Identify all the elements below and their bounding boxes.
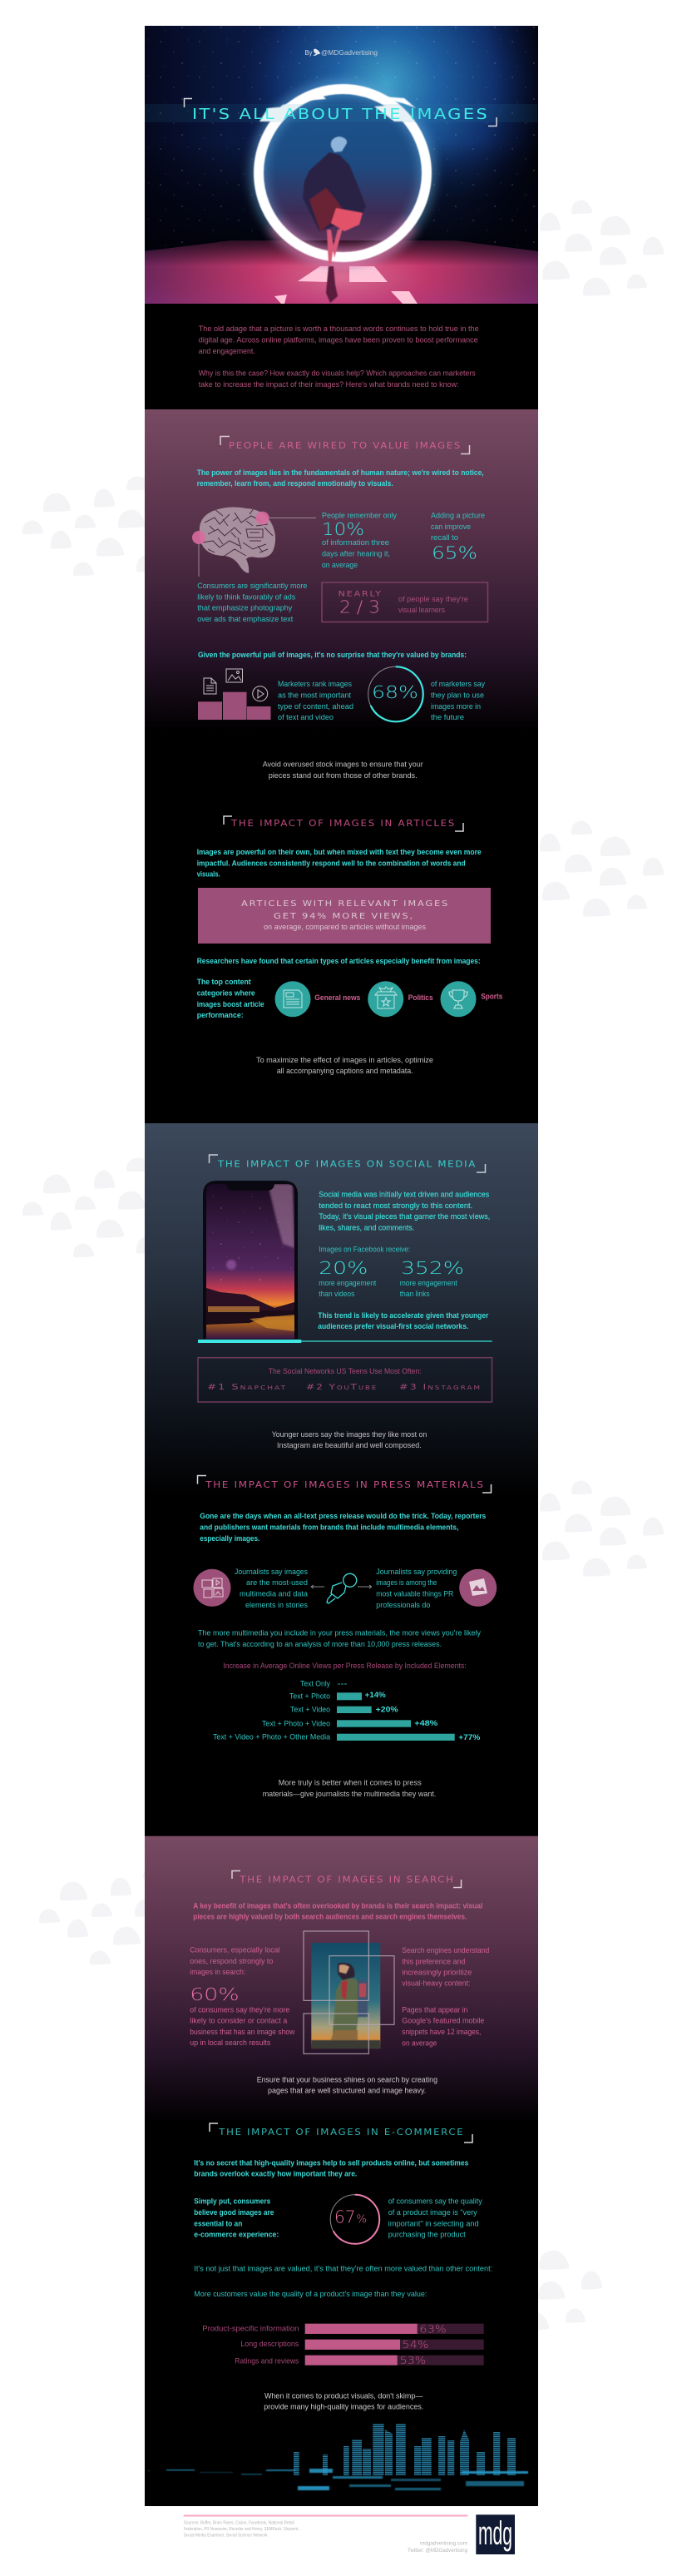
- sources: Social Media Examiner, Social Science Network: [184, 2534, 268, 2539]
- contact: [408, 2541, 467, 2554]
- row: text + photo + video: +48%: [414, 1719, 437, 1727]
- lead text: and publishers want materials from brands that include multimedia elements,: [200, 1523, 458, 1532]
- takeaway: instagram: Instagram are beautiful and well composed.: [277, 1441, 422, 1449]
- takeaway: captions and metadata: To maximize the effect of images in articles, optimize: [256, 1056, 433, 1064]
- stat: 352 percent: more engagement: [400, 1279, 457, 1287]
- lead text: brands overlook exactly how important they are.: [194, 2170, 357, 2178]
- text: top categories: [197, 978, 264, 1019]
- text: consumers: over ads that emphasize text: [197, 615, 294, 623]
- icon: bird: [313, 48, 320, 56]
- image: explorer looking up, with frames: [304, 1931, 394, 2053]
- contact: Twitter: @MDGadvertising: [408, 2549, 467, 2554]
- text: quality of a product image: purchasing the product: [388, 2231, 466, 2239]
- text: simply put: e-commerce experience:: [194, 2231, 279, 2239]
- text: search engines: this preference and: [402, 1957, 465, 1965]
- text: top categories: categories where: [197, 989, 255, 998]
- takeaway: stock images: pieces stand out from those of other brands.: [269, 771, 418, 780]
- row: long descriptions: 54%: [403, 2339, 428, 2351]
- heading: [198, 1476, 491, 1493]
- row: text + photo + video: Text + Photo + Video: [262, 1719, 330, 1727]
- icon: document: [204, 678, 216, 694]
- stat: 65 percent: Adding a picture: [431, 512, 485, 520]
- heading: [224, 816, 463, 831]
- text: search engines: on average: [402, 2039, 437, 2047]
- stat: 10 percent: 10%: [322, 519, 364, 539]
- stat: 10 percent: on average: [322, 561, 358, 569]
- text: marketers plan: the future: [431, 713, 464, 721]
- bar chart: views by elements: Text Only: [300, 1680, 330, 1688]
- illustration: neon city skyline: [148, 2424, 528, 2490]
- arrow: right: [358, 1585, 372, 1588]
- row: all media: +77%: [458, 1733, 480, 1741]
- heading: THE IMPACT OF IMAGES IN ARTICLES: [230, 819, 456, 829]
- text: quality of a product image: of consumers say the quality: [388, 2197, 482, 2206]
- row: all media: [213, 1733, 480, 1741]
- panel: impact of images in search: [145, 1836, 538, 2123]
- icon: video play: [253, 686, 268, 701]
- panel: dark backdrop column: [145, 26, 538, 2506]
- takeaway: product visuals: [264, 2391, 423, 2411]
- text block: intro: digital age. Across online platforms, images have been proven to boost performance: [199, 336, 478, 344]
- row: text + video: Text + Video: [290, 1706, 330, 1714]
- lead text: visuals.: [197, 870, 220, 879]
- row: text + video: [290, 1705, 398, 1714]
- row: text + video: +20%: [376, 1705, 398, 1713]
- stat: 20 percent: more engagement: [319, 1279, 377, 1287]
- callout: social networks teens use: [198, 1358, 492, 1402]
- heading: THE IMPACT OF IMAGES IN E-COMMERCE: [218, 2128, 464, 2138]
- stat: 65 percent: 65%: [432, 543, 477, 563]
- contact: mdgadvertising.com: [420, 2541, 467, 2546]
- icon: general news: [274, 981, 360, 1017]
- text: more valued: It's not just that images are valued, it's that they're often more valued than other content:: [194, 2264, 492, 2272]
- bar chart: customer values: [202, 2323, 484, 2366]
- heading: [220, 436, 469, 454]
- text: more valued: [194, 2264, 492, 2298]
- subhead: researchers: Researchers have found that certain types of articles especially benefit from images:: [197, 957, 481, 965]
- logo: mdg: [476, 2514, 515, 2554]
- callout: nearly 2/3: [322, 582, 487, 622]
- text: more multimedia: to get. That's according to an analysis of more than 10,000 press releases.: [198, 1640, 442, 1648]
- text: marketers rank images: [278, 680, 353, 721]
- stat: 10 percent: [322, 512, 397, 569]
- takeaway: stock images: Avoid overused stock images to ensure that your: [263, 760, 423, 769]
- text: journalists providing: Journalists say providing: [376, 1568, 457, 1576]
- subhead: brands: Given the powerful pull of images, it's no surprise that they're valued by brands:: [198, 651, 467, 659]
- text: more valued: More customers value the quality of a product's image than they value:: [194, 2290, 427, 2298]
- sources: Federation, PR Newswire, Rountier and Henry, SEMRush, Skyword,: [184, 2527, 299, 2532]
- stat: 60 percent: 60%: [190, 1984, 240, 2004]
- donut: 68 percent: [368, 666, 423, 721]
- text: simply put: Simply put, consumers: [194, 2197, 270, 2206]
- row: ratings and reviews: Ratings and reviews: [235, 2356, 299, 2365]
- stat: 60 percent: likely to consider or contact a: [190, 2017, 288, 2025]
- icon: picture: [226, 669, 243, 682]
- panel: impact of images in press materials: [193, 1476, 497, 1798]
- text: marketers plan: they plan to use: [431, 691, 484, 700]
- text: social media: likes, shares, and comments.: [319, 1224, 414, 1232]
- text: journalists images: [235, 1568, 309, 1609]
- panel: impact of images on social media: [145, 1123, 538, 1498]
- text: search engines: Google's featured mobile: [402, 2017, 484, 2025]
- text: marketers rank images: type of content, ahead: [278, 702, 353, 711]
- text block: intro: The old adage that a picture is worth a thousand words continues to hold true in the: [199, 324, 479, 333]
- figure: [303, 136, 366, 303]
- lead text: remember, learn from, and respond emotionally to visuals.: [197, 479, 393, 488]
- takeaway: search: Ensure that your business shines on search by creating: [257, 2075, 437, 2083]
- text: journalists providing: professionals do: [376, 1601, 430, 1609]
- takeaway: instagram: [272, 1430, 427, 1449]
- text: journalists providing: [376, 1568, 457, 1609]
- text: marketers rank images: as the most important: [278, 691, 351, 700]
- text: social media: [319, 1191, 490, 1254]
- icon: multimedia: [193, 1569, 231, 1607]
- panel: impact of images in articles: [197, 816, 502, 1019]
- row: product information: 63%: [419, 2323, 447, 2335]
- text: marketers rank images: of text and video: [278, 713, 334, 721]
- callout: 94 percent more views: GET 94% MORE VIEWS,: [274, 912, 414, 921]
- brain callout dot top: [256, 512, 316, 525]
- lead text: A key benefit of images that's often overlooked by brands is their search impact: visual: [193, 1901, 482, 1910]
- icon: microphone: [327, 1573, 357, 1603]
- text: journalists images: are the most-used: [246, 1578, 308, 1587]
- floor: [145, 240, 538, 304]
- stat: 20 percent: 20%: [319, 1258, 368, 1278]
- icon: brain: [200, 508, 275, 573]
- stat: 60 percent: Consumers, especially local: [190, 1946, 279, 1954]
- donut: 67 percent: [330, 2195, 379, 2244]
- text: top categories: The top content: [197, 978, 251, 986]
- row: product information: [202, 2323, 484, 2335]
- text: marketers plan: images more in: [431, 702, 481, 711]
- stat: 60 percent: images in search:: [190, 1968, 245, 1976]
- byline: By: [304, 48, 313, 57]
- text: social media: Social media was initially text driven and audiences: [319, 1191, 490, 1199]
- callout: social networks teens use: The Social Networks US Teens Use Most Often:: [269, 1367, 422, 1375]
- stat: 352 percent: than links: [400, 1290, 430, 1298]
- row: text + photo: +14%: [365, 1691, 386, 1699]
- text: more multimedia: The more multimedia you include in your press materials, the more views you're likely: [198, 1629, 481, 1637]
- lead text: pieces are highly valued by both search audiences and search engines themselves.: [193, 1913, 467, 1921]
- title: IT'S ALL ABOUT THE IMAGES: [192, 106, 489, 123]
- lead text: impactful. Audiences consistently respond well to the combination of words and: [197, 859, 466, 868]
- background dotted blob clusters: [22, 200, 664, 2331]
- panel: impact of images in e-commerce: [148, 2123, 528, 2490]
- text: top categories: performance:: [197, 1011, 244, 1019]
- stat: 10 percent: days after hearing it,: [322, 549, 390, 557]
- text: journalists images: elements in stories: [245, 1601, 308, 1609]
- callout: nearly 2/3: of people say they're: [398, 595, 468, 603]
- text: marketers plan: [431, 680, 485, 721]
- text: social media: Images on Facebook receive:: [319, 1246, 410, 1254]
- chart title: Increase in Average Online Views per Press Release by Included Elements:: [223, 1662, 467, 1670]
- callout: nearly 2/3: 2 / 3: [339, 597, 380, 617]
- icon: general news: General news: [314, 993, 360, 1002]
- stat: 10 percent: of information three: [322, 538, 389, 547]
- text block: intro: take to increase the impact of their images? Here's what brands need to know:: [199, 380, 459, 389]
- text: consumers: [197, 582, 307, 623]
- stat: 352 percent: [400, 1258, 464, 1298]
- text block: intro: [199, 324, 479, 389]
- takeaway: captions and metadata: all accompanying captions and metadata.: [277, 1067, 413, 1075]
- text: search engines: increasingly prioritize: [402, 1968, 472, 1976]
- text: search engines: [402, 1946, 489, 2047]
- takeaway: search: pages that are well structured and image heavy.: [268, 2087, 426, 2095]
- moon disc: [263, 93, 423, 253]
- stat: 20 percent: than videos: [319, 1290, 355, 1298]
- image: phone with night sky: [203, 1181, 298, 1339]
- text: trend: [318, 1311, 489, 1330]
- text: journalists images: multimedia and data: [240, 1590, 309, 1598]
- text: social media: tended to react most strongly to this content.: [319, 1201, 472, 1210]
- row: product information: Product-specific information: [202, 2324, 299, 2332]
- takeaway: product visuals: provide many high-quality images for audiences.: [264, 2403, 423, 2411]
- lead text: [200, 1512, 486, 1543]
- text: quality of a product image: of a product image is "very: [388, 2208, 477, 2217]
- bar chart: views by elements: [213, 1680, 480, 1741]
- row: text + photo: [289, 1691, 386, 1700]
- text: marketers rank images: Marketers rank images: [278, 680, 352, 688]
- text: simply put: essential to an: [194, 2219, 243, 2227]
- takeaway: captions and metadata: [256, 1056, 433, 1075]
- text: quality of a product image: important" in selecting and: [388, 2219, 479, 2227]
- panel: hero illustration and title: [145, 26, 538, 304]
- stat: 65 percent: [431, 512, 485, 563]
- text: journalists providing: most valuable things PR: [376, 1590, 454, 1598]
- text: quality of a product image: [388, 2197, 482, 2239]
- sources: [184, 2520, 299, 2539]
- stat: 60 percent: of consumers say they're more: [190, 2005, 289, 2014]
- text: journalists images: Journalists say images: [235, 1568, 308, 1576]
- lead text: [197, 848, 482, 879]
- stat: 60 percent: [190, 1946, 295, 2047]
- lead text: It's no secret that high-quality images help to sell products online, but sometimes: [194, 2158, 468, 2167]
- brain callout dot left: [192, 531, 205, 577]
- lead text: Images are powerful on their own, but when mixed with text they become even more: [197, 848, 482, 856]
- takeaway: press materials: [263, 1779, 436, 1798]
- text: search engines: visual-heavy content:: [402, 1979, 470, 1988]
- lead text: [193, 1901, 482, 1921]
- stat: 60 percent: ones, respond strongly to: [190, 1957, 273, 1965]
- ring glitch slices: [259, 96, 416, 121]
- text: simply put: believe good images are: [194, 2208, 274, 2217]
- stat: 65 percent: can improve: [431, 523, 471, 531]
- text: search engines: Search engines understand: [402, 1946, 489, 1954]
- callout: 94 percent more views: [198, 888, 491, 944]
- text: search engines: snippets have 12 images,: [402, 2028, 481, 2036]
- chart: content ranking podium: [198, 669, 271, 720]
- title: [185, 98, 497, 126]
- takeaway: press materials: More truly is better when it comes to press: [279, 1779, 422, 1787]
- text: top categories: images boost article: [197, 1000, 264, 1008]
- sources: Sources: Buffer, Brain Rules, Cision, Facebook, National Retail: [184, 2520, 294, 2525]
- text: journalists providing: images is among the: [376, 1578, 437, 1587]
- panel: people are wired to value images: [145, 409, 538, 732]
- text: social media: Today, it's visual pieces that garner the most views,: [319, 1212, 490, 1221]
- takeaway: press materials: materials—give journalists the multimedia they want.: [263, 1790, 436, 1798]
- heading: [210, 2123, 472, 2143]
- donut: 67 percent: 67%: [334, 2207, 367, 2227]
- text: trend: This trend is likely to accelerate given that younger: [318, 1311, 489, 1320]
- callout: social networks teens use: #2 YouTube: [306, 1383, 378, 1392]
- row: text + photo: Text + Photo: [289, 1692, 330, 1700]
- row: text + photo + video: [262, 1719, 437, 1727]
- lead text: [194, 2158, 468, 2178]
- callout: nearly 2/3: visual learners: [398, 606, 445, 614]
- row: long descriptions: Long descriptions: [240, 2340, 299, 2348]
- row: long descriptions: [240, 2339, 484, 2351]
- footer: [184, 2514, 515, 2554]
- icon: photos: [459, 1569, 497, 1607]
- text: more multimedia: [198, 1629, 481, 1648]
- row: ratings and reviews: [235, 2355, 484, 2366]
- row: ratings and reviews: 53%: [400, 2355, 426, 2366]
- lead text: Gone are the days when an all-text press release would do the trick. Today, reporters: [200, 1512, 486, 1520]
- heading: PEOPLE ARE WIRED TO VALUE IMAGES: [229, 441, 462, 451]
- callout: 94 percent more views: ARTICLES WITH RELEVANT IMAGES: [241, 899, 449, 909]
- lead text: [197, 468, 484, 488]
- callout: social networks teens use: #3 Instagram: [399, 1383, 482, 1392]
- stat: 20 percent: [319, 1258, 377, 1298]
- arrow: left: [311, 1585, 324, 1588]
- text: consumers: likely to think favorably of ads: [197, 593, 296, 602]
- stat: 10 percent: People remember only: [322, 512, 397, 520]
- heading: [232, 1870, 461, 1887]
- icon: sports trophy: Sports: [481, 993, 502, 1001]
- heading: [210, 1155, 486, 1172]
- text: simply put: [194, 2197, 279, 2239]
- icon: sports trophy: [441, 981, 502, 1017]
- takeaway: search: [257, 2075, 437, 2095]
- text: trend: audiences prefer visual-first social networks.: [318, 1322, 468, 1330]
- text: consumers: that emphasize photography: [197, 604, 293, 612]
- heading: THE IMPACT OF IMAGES IN PRESS MATERIALS: [205, 1480, 485, 1490]
- lead text: The power of images lies in the fundamentals of human nature; we're wired to notice,: [197, 468, 484, 477]
- takeaway: product visuals: When it comes to product visuals, don't skimp—: [264, 2391, 423, 2400]
- baseline rule: [198, 1340, 492, 1343]
- callout: social networks teens use: #1 Snapchat: [207, 1383, 287, 1392]
- donut: 68 percent: 68%: [372, 682, 418, 702]
- callout: 94 percent more views: on average, compared to articles without images: [264, 923, 426, 931]
- lead text: especially images.: [200, 1534, 259, 1543]
- icon: politics: Politics: [408, 993, 433, 1002]
- stat: 352 percent: 352%: [401, 1258, 464, 1278]
- text: consumers: Consumers are significantly more: [197, 582, 307, 590]
- takeaway: stock images: [263, 760, 423, 780]
- byline handle: @MDGadvertising: [321, 48, 378, 57]
- glowing ring: [258, 88, 427, 259]
- logo: mdg: mdg: [478, 2515, 512, 2552]
- takeaway: instagram: Younger users say the images they like most on: [272, 1430, 427, 1439]
- stat: 60 percent: business that has an image show: [190, 2028, 295, 2036]
- row: all media: Text + Video + Photo + Other Media: [213, 1733, 331, 1741]
- title band: [145, 104, 537, 122]
- callout: nearly 2/3: NEARLY: [339, 591, 383, 599]
- stat: 65 percent: recall to: [431, 533, 458, 542]
- heading: THE IMPACT OF IMAGES ON SOCIAL MEDIA: [217, 1160, 477, 1170]
- icon: politics: [368, 981, 433, 1017]
- text block: intro: Why is this the case? How exactly do visuals help? Which approaches can marketers: [199, 369, 476, 378]
- text: search engines: Pages that appear in: [402, 2005, 467, 2014]
- text: marketers plan: of marketers say: [431, 680, 485, 688]
- heading: THE IMPACT OF IMAGES IN SEARCH: [239, 1875, 455, 1885]
- stat: 60 percent: up in local search results: [190, 2039, 271, 2047]
- text block: intro: and engagement.: [199, 347, 255, 355]
